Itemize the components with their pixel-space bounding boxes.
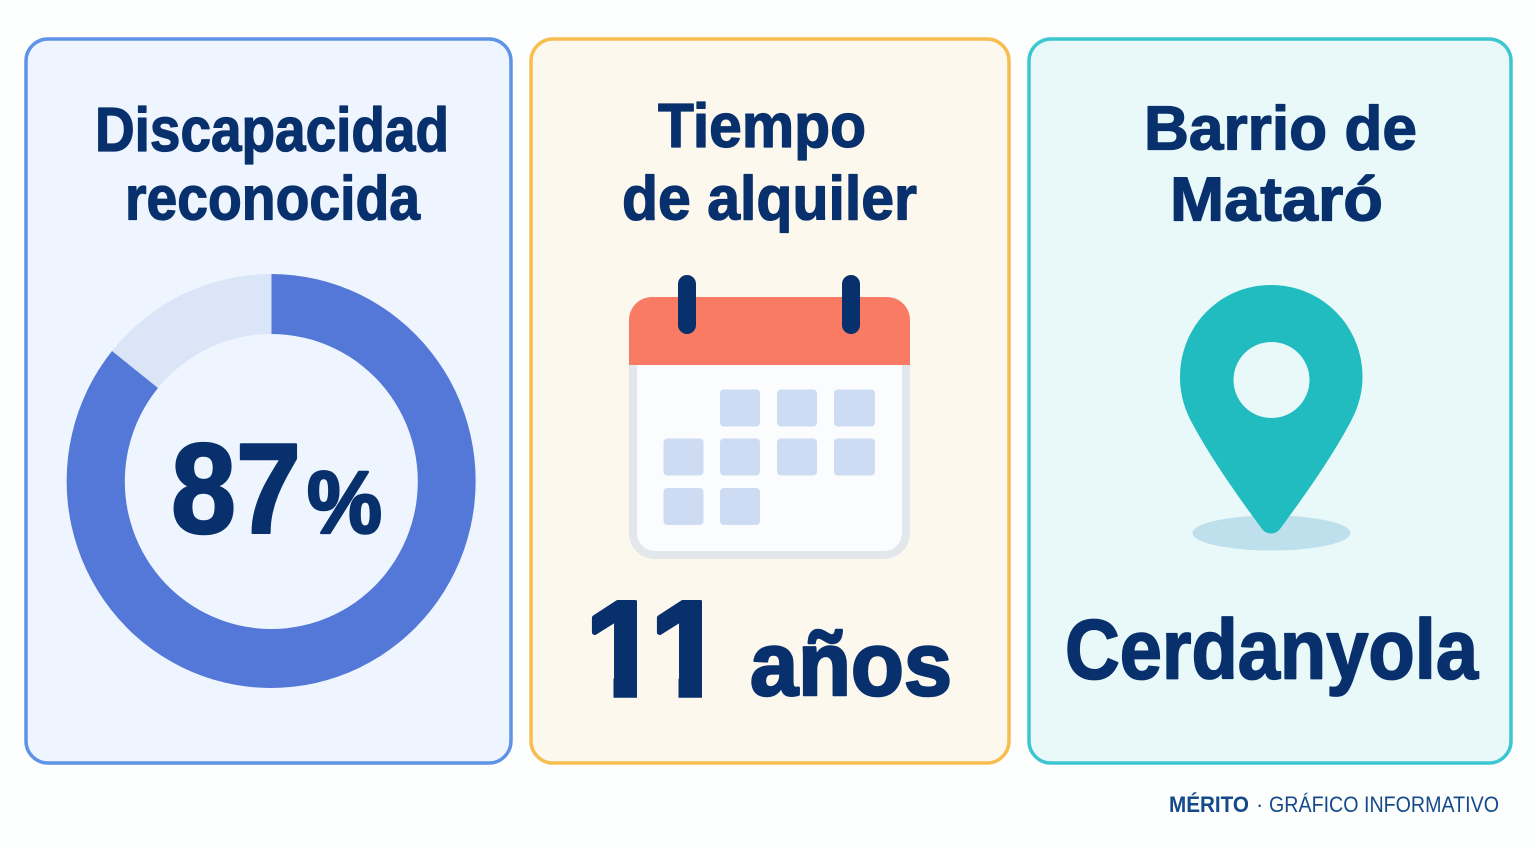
value: 87% <box>171 418 382 561</box>
heading: discapacidad reconocida: Discapacidad <box>95 96 449 165</box>
footer credit: GRÁFICO INFORMATIVO <box>1269 792 1499 817</box>
value: 11 años: 1 <box>586 575 660 724</box>
heading: barrio de mataró <box>1144 94 1417 234</box>
heading: discapacidad reconocida <box>95 96 449 234</box>
panel: tiempo de alquiler <box>531 39 1009 763</box>
footer credit: MÉRITO <box>1169 792 1249 817</box>
panel: barrio de mataró <box>1029 39 1511 763</box>
heading: discapacidad reconocida: reconocida <box>125 164 420 234</box>
value: 87%: % <box>307 453 382 552</box>
footer credit: · <box>1256 792 1263 817</box>
value: 11 años: años <box>750 615 952 715</box>
value: 11 años <box>592 600 950 698</box>
donut chart: 87% <box>67 274 476 688</box>
footer credit <box>1169 792 1499 817</box>
heading: tiempo de alquiler: de alquiler <box>622 164 917 234</box>
heading: barrio de mataró: Barrio de <box>1144 94 1417 164</box>
panel: discapacidad reconocida <box>26 39 511 763</box>
value: cerdanyola: Cerdanyola <box>1065 602 1479 696</box>
heading: tiempo de alquiler <box>622 92 917 234</box>
icon: location pin <box>1180 285 1362 550</box>
icon: calendar <box>629 275 910 555</box>
heading: tiempo de alquiler: Tiempo <box>658 92 866 161</box>
value: 11 años: 1 <box>650 575 725 724</box>
heading: barrio de mataró: Mataró <box>1170 166 1383 234</box>
value: 87%: 87 <box>171 418 301 561</box>
